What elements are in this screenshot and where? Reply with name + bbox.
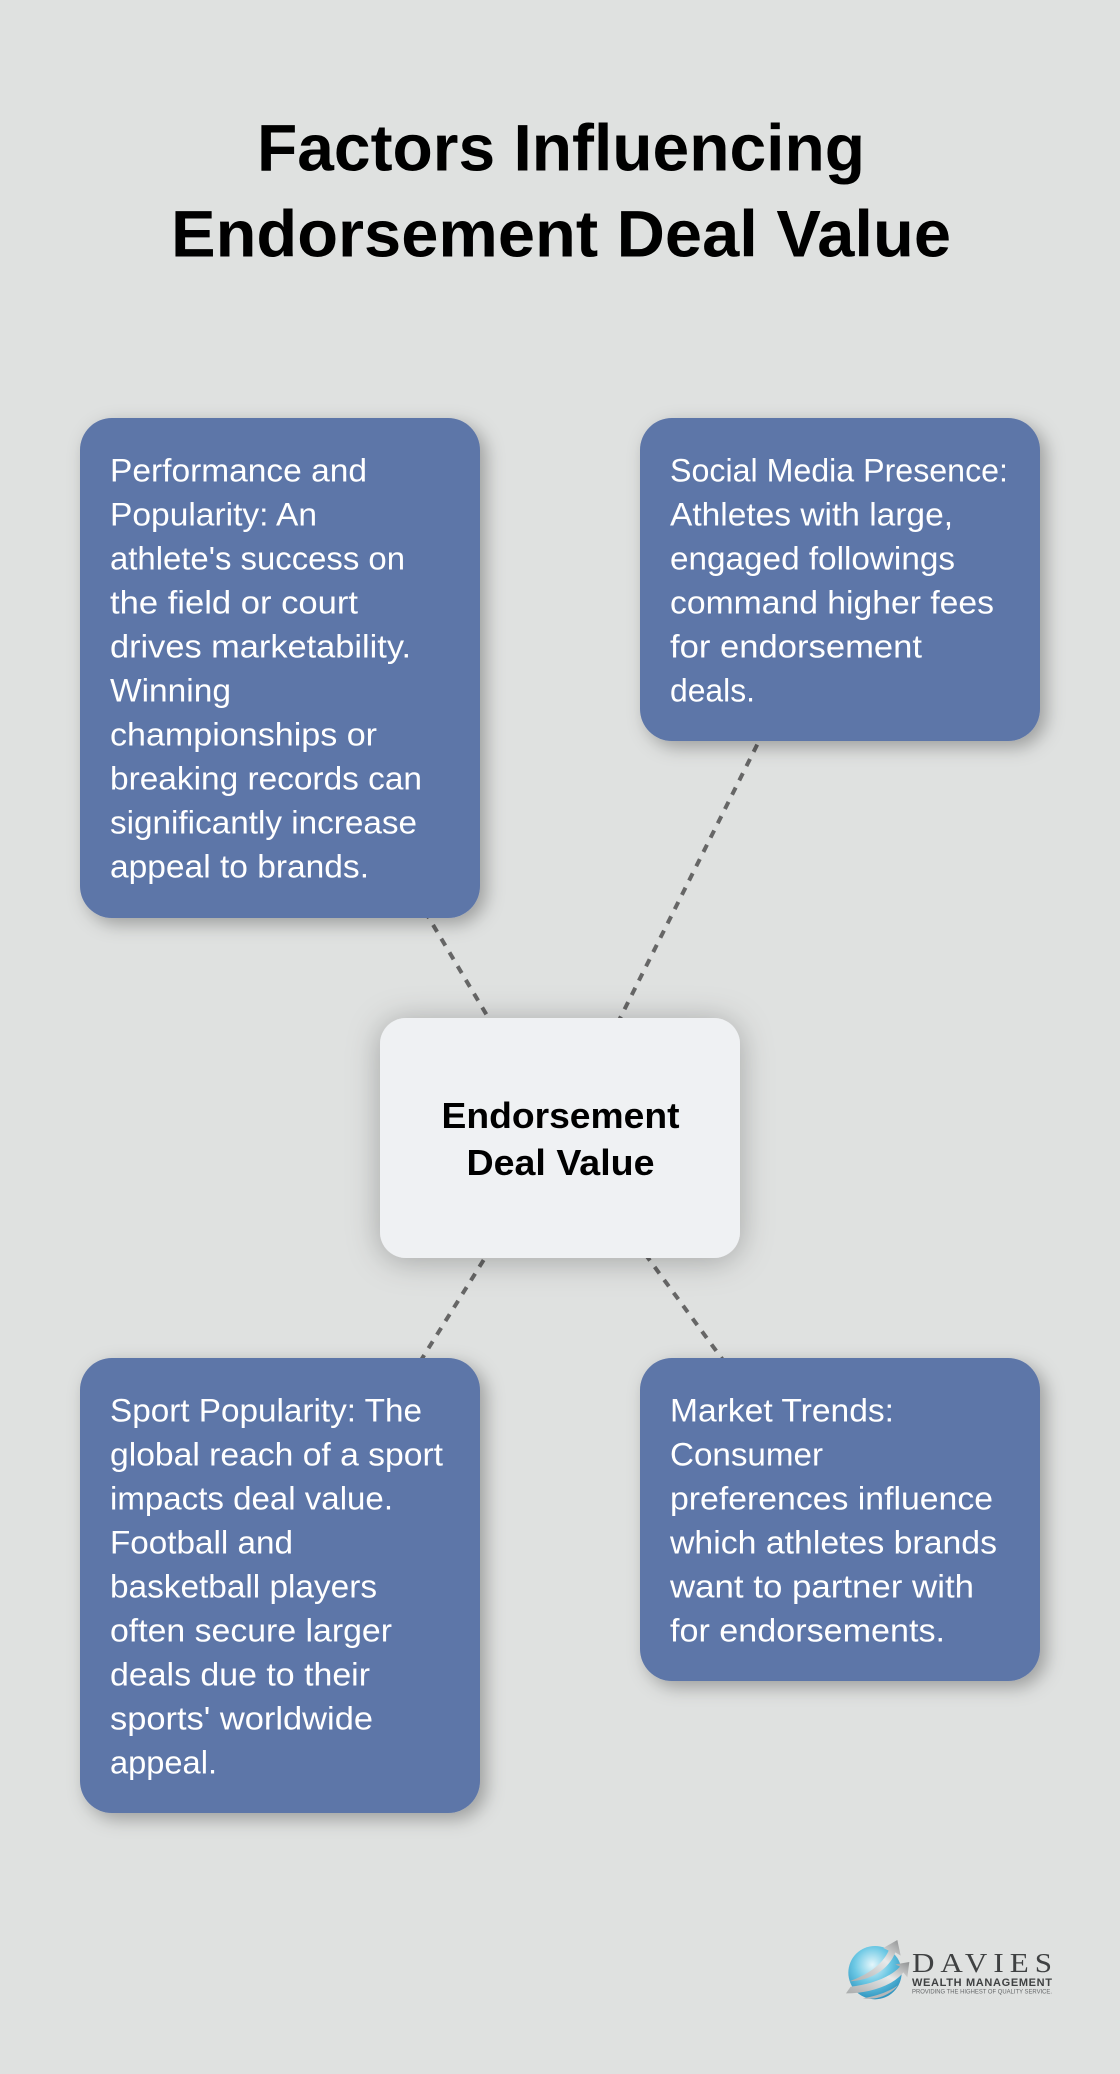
- panel: center endorsement deal value: [380, 1018, 740, 1258]
- wordmark: WEALTH MANAGEMENT: WEALTH MANAGEMENT: [912, 1977, 1052, 1989]
- title: Factors Influencing: [257, 110, 865, 184]
- text block: social media presence: Athletes with large,: [670, 496, 953, 532]
- center label: Deal Value: [466, 1142, 654, 1183]
- text block: market trends: [669, 1392, 997, 1648]
- panel: sport popularity: [80, 1358, 480, 1813]
- text block: social media presence: for endorsement: [670, 628, 922, 664]
- text block: performance and popularity: drives marketability.: [110, 628, 411, 664]
- text block: sport popularity: global reach of a sport: [110, 1436, 443, 1472]
- text block: performance and popularity: championships or: [110, 716, 377, 752]
- connector: sport popularity to center: [280, 1138, 560, 1586]
- text block: market trends: for endorsements.: [670, 1612, 945, 1648]
- text block: sport popularity: sports' worldwide: [110, 1700, 373, 1736]
- panel: market trends: [640, 1358, 1040, 1681]
- icon: globe with arrows: [846, 1940, 909, 1999]
- text block: sport popularity: Football and: [110, 1524, 293, 1560]
- text block: performance and popularity: the field or court: [110, 584, 358, 620]
- text block: sport popularity: Sport Popularity: The: [110, 1392, 422, 1428]
- text block: market trends: preferences influence: [670, 1480, 993, 1516]
- text block: performance and popularity: Popularity: An: [110, 496, 317, 532]
- text block: sport popularity: impacts deal value.: [110, 1480, 393, 1516]
- text block: performance and popularity: appeal to brands.: [110, 848, 369, 884]
- text block: sport popularity: appeal.: [110, 1744, 217, 1780]
- connector: market trends to center: [560, 1138, 840, 1520]
- connector: performance to center: [280, 668, 560, 1138]
- text block: performance and popularity: [110, 452, 422, 884]
- title: [171, 110, 951, 270]
- text block: social media presence: Social Media Presence:: [670, 452, 1008, 488]
- text block: performance and popularity: Winning: [110, 672, 231, 708]
- text block: sport popularity: basketball players: [110, 1568, 377, 1604]
- panel: performance and popularity: [80, 418, 480, 918]
- text block: market trends: which athletes brands: [669, 1524, 997, 1560]
- text block: performance and popularity: Performance and: [110, 452, 367, 488]
- text block: performance and popularity: athlete's success on: [110, 540, 405, 576]
- text block: performance and popularity: breaking records can: [110, 760, 422, 796]
- text block: social media presence: [670, 452, 1008, 708]
- text block: sport popularity: [110, 1392, 443, 1780]
- title: Endorsement Deal Value: [171, 196, 951, 270]
- text block: social media presence: command higher fees: [670, 584, 994, 620]
- center label: Endorsement: [442, 1095, 680, 1136]
- text block: sport popularity: deals due to their: [110, 1656, 370, 1692]
- text block: performance and popularity: significantly increase: [110, 804, 417, 840]
- tagline: PROVIDING THE HIGHEST OF QUALITY SERVICE.: [912, 1988, 1052, 1996]
- text block: social media presence: engaged followings: [670, 540, 955, 576]
- text block: market trends: Market Trends:: [670, 1392, 894, 1428]
- dashed connectors: [280, 580, 840, 1586]
- panel: social media presence: [640, 418, 1040, 741]
- wordmark: DAVIES: DAVIES: [912, 1949, 1052, 1978]
- text block: market trends: want to partner with: [669, 1568, 974, 1604]
- connector: social media to center: [560, 580, 840, 1138]
- text block: sport popularity: often secure larger: [110, 1612, 392, 1648]
- center label: [442, 1095, 680, 1183]
- text block: social media presence: deals.: [670, 672, 755, 708]
- text block: market trends: Consumer: [670, 1436, 823, 1472]
- logo: Davies Wealth Management: [846, 1940, 1052, 1999]
